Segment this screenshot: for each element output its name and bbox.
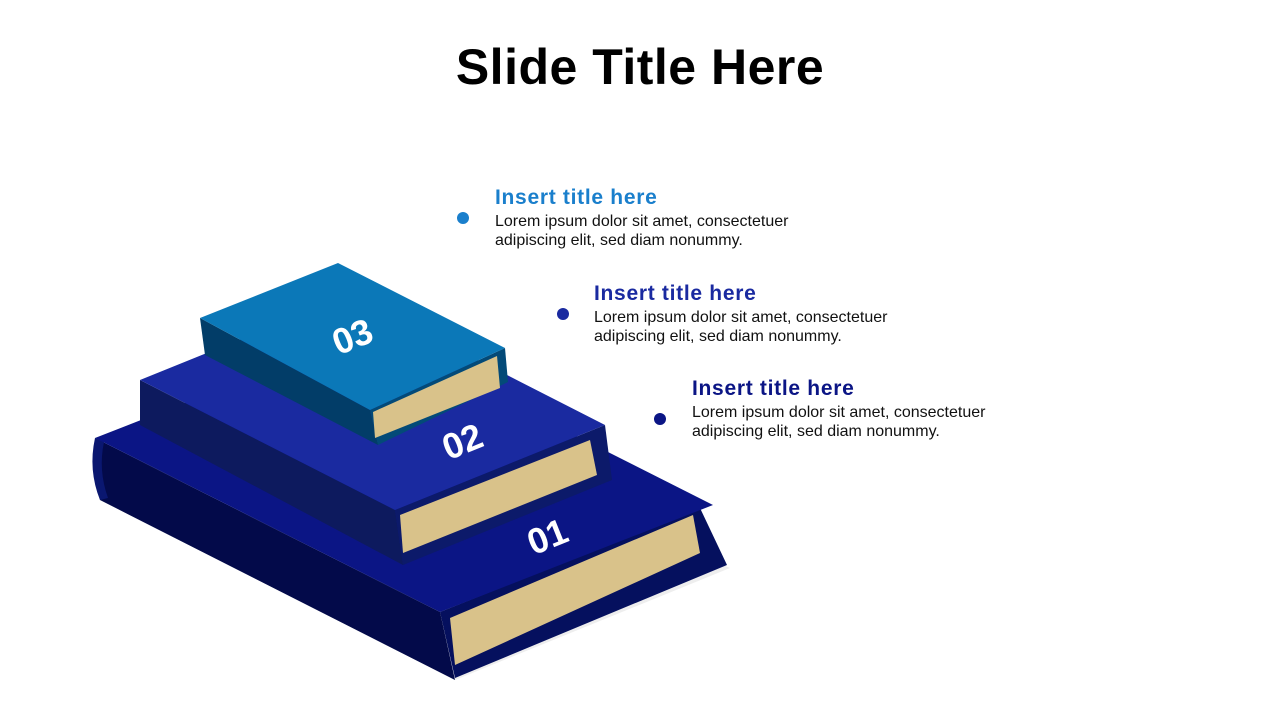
text block 3: Lorem ipsum dolor sit amet, consectetuer [495, 213, 788, 230]
title: Slide Title Here [456, 39, 824, 95]
text block 2: Lorem ipsum dolor sit amet, consectetuer [594, 309, 887, 326]
book 03: 03 [326, 310, 379, 363]
book 02: 02 [436, 415, 489, 468]
text block 1: adipiscing elit, sed diam nonummy. [692, 423, 940, 440]
text block 2 [594, 282, 888, 345]
text block 3: Insert title here [495, 186, 657, 209]
bullet dot 2 [557, 308, 569, 320]
text block 1: Lorem ipsum dolor sit amet, consectetuer [692, 404, 985, 421]
book 01: 01 [521, 510, 574, 563]
book 02 [140, 295, 612, 565]
text block 2: Insert title here [594, 282, 756, 305]
text block 3: adipiscing elit, sed diam nonummy. [495, 232, 743, 249]
text block 1 [692, 377, 986, 440]
book 03 [200, 263, 508, 445]
text block 1: Insert title here [692, 377, 854, 400]
book 01 [92, 331, 730, 680]
bullet dot 3 [457, 212, 469, 224]
bullet dot 1 [654, 413, 666, 425]
text block 2: adipiscing elit, sed diam nonummy. [594, 328, 842, 345]
text block 3 [495, 186, 788, 249]
